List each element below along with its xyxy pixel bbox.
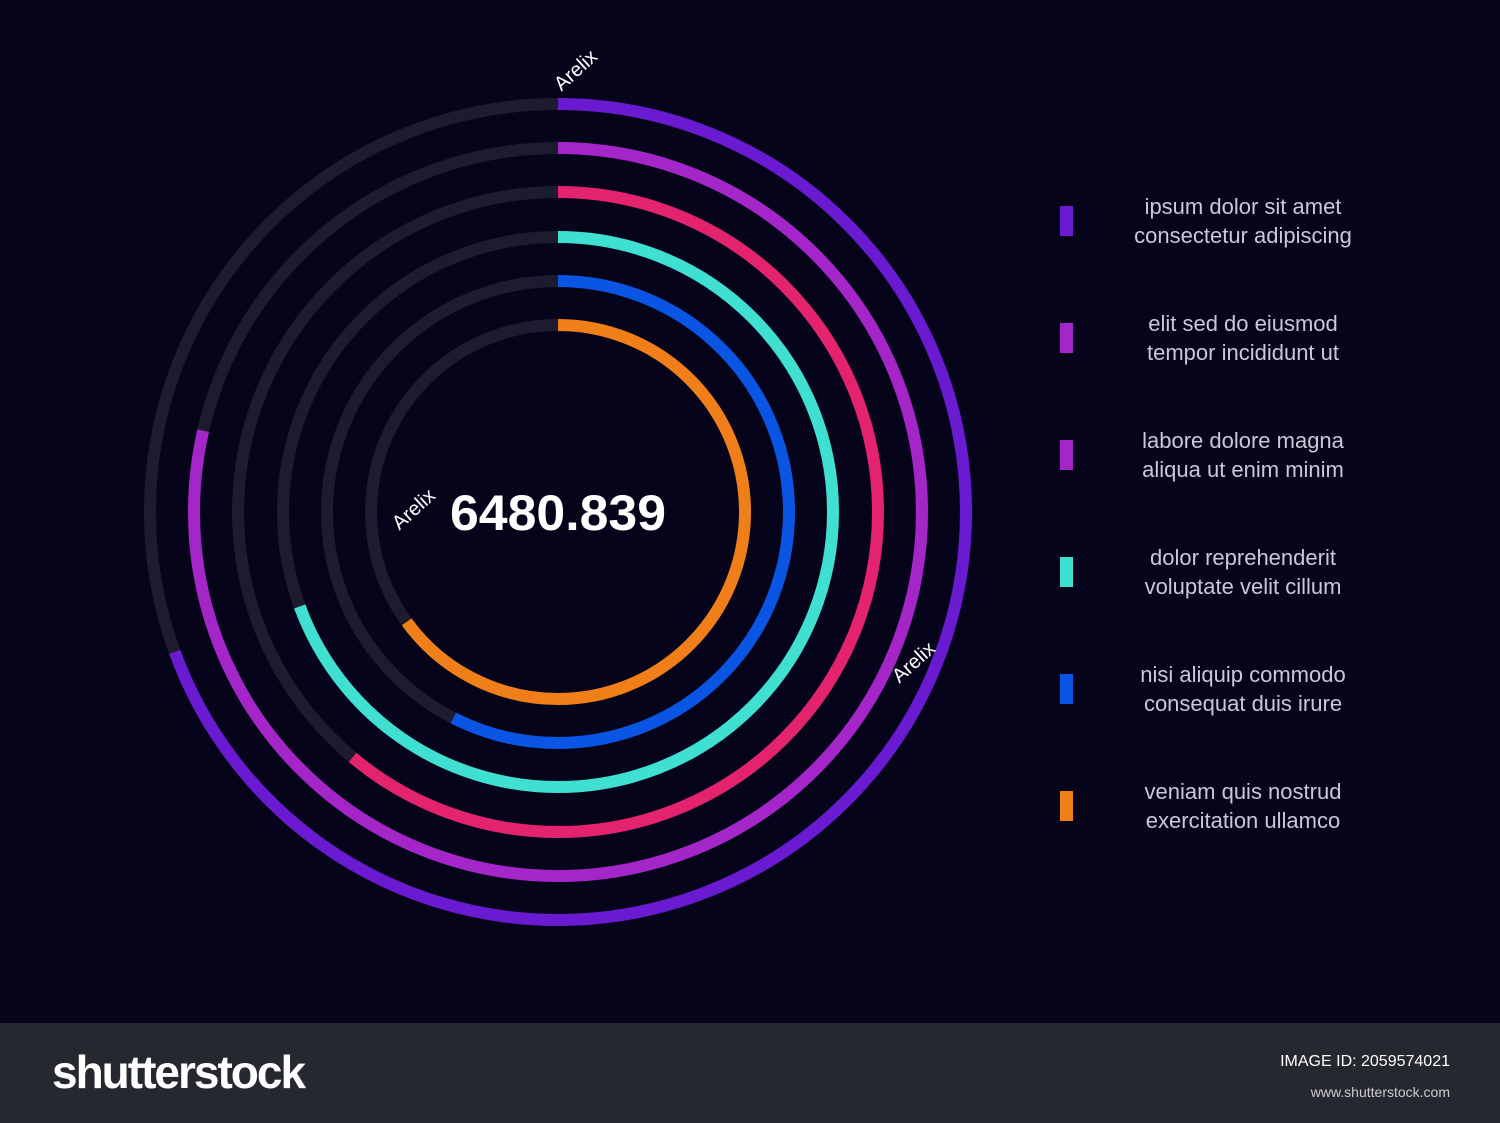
legend item 1 xyxy=(1060,194,1352,248)
footer bar xyxy=(0,1023,1500,1123)
legend item 3: aliqua ut enim minim xyxy=(1142,457,1344,482)
legend item 5: nisi aliquip commodo xyxy=(1140,662,1346,687)
legend item 1: ipsum dolor sit amet xyxy=(1145,194,1341,219)
legend item 4: dolor reprehenderit xyxy=(1150,545,1336,570)
label arelix center: Arelix xyxy=(388,485,440,534)
legend item 6: veniam quis nostrud xyxy=(1145,779,1341,804)
footer image id: www.shutterstock.com xyxy=(1311,1084,1450,1100)
legend item 1: consectetur adipiscing xyxy=(1134,223,1352,248)
legend item 6: exercitation ullamco xyxy=(1146,808,1340,833)
footer image id xyxy=(1280,1053,1450,1100)
legend item 2 xyxy=(1060,311,1339,365)
footer logo: shutterstock xyxy=(52,1046,304,1098)
label arelix right: Arelix xyxy=(888,638,940,687)
legend item 2: elit sed do eiusmod xyxy=(1148,311,1338,336)
legend item 3 xyxy=(1060,428,1344,482)
legend item 2: tempor incididunt ut xyxy=(1147,340,1339,365)
legend item 6 xyxy=(1060,779,1341,833)
center value: 6480.839 xyxy=(450,485,666,541)
legend item 4: voluptate velit cillum xyxy=(1145,574,1341,599)
arcs xyxy=(150,104,966,920)
legend item 5 xyxy=(1060,662,1346,716)
footer image id: IMAGE ID: 2059574021 xyxy=(1280,1053,1450,1070)
legend item 5: consequat duis irure xyxy=(1144,691,1342,716)
legend xyxy=(1060,194,1352,833)
legend item 3: labore dolore magna xyxy=(1142,428,1344,453)
label arelix top: Arelix xyxy=(550,46,602,95)
legend item 4 xyxy=(1060,545,1341,599)
